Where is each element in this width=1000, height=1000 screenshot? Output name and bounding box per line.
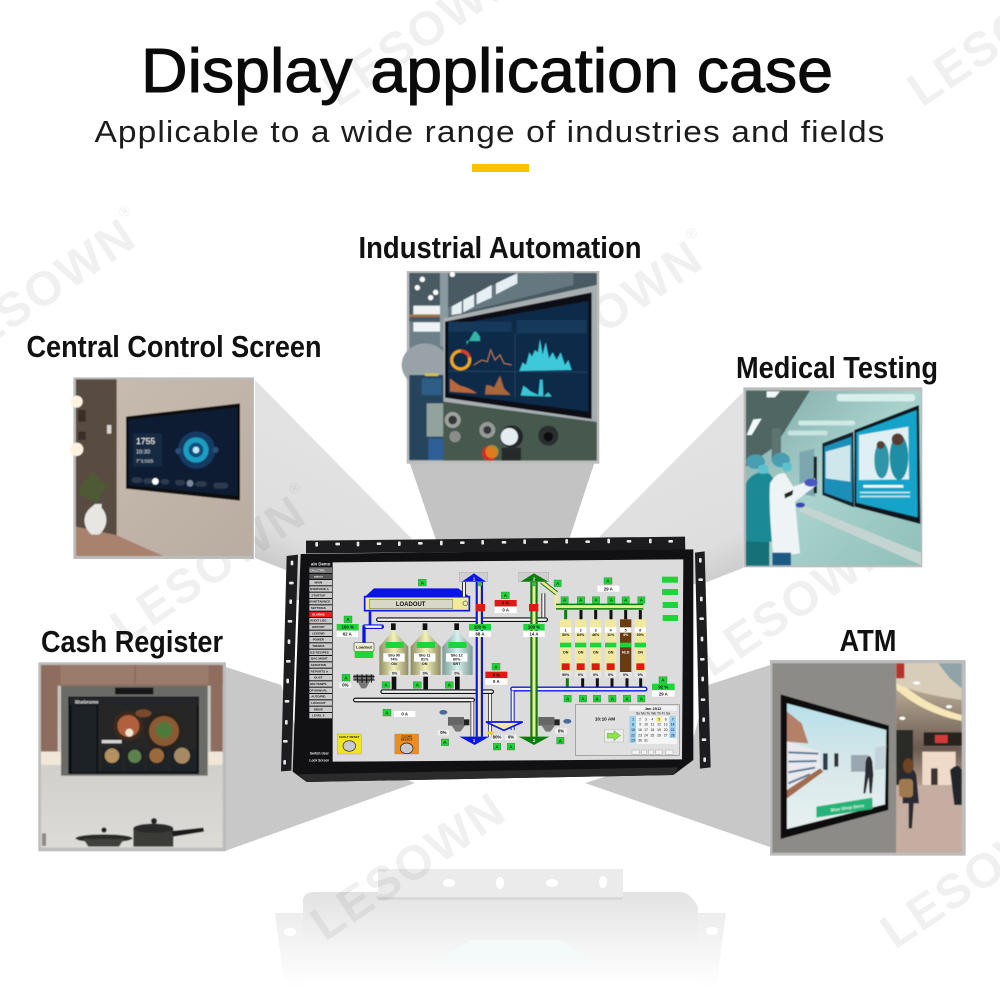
brand watermarks: LESOWN xyxy=(302,783,516,951)
amp readouts: 0% xyxy=(342,683,349,688)
clock and calendar panel: 31 xyxy=(644,739,648,743)
HMI sidebar: DUST xyxy=(314,676,323,680)
silos: 0% xyxy=(423,672,429,676)
panel: Industrial Automation photo xyxy=(402,271,599,464)
panel: Central Control Screen photo xyxy=(70,377,254,559)
clock and calendar panel: 10:10 AM xyxy=(595,716,615,721)
reflection of monitor xyxy=(275,869,726,990)
panel: central monitor xyxy=(281,537,711,782)
amp readouts: 68 A xyxy=(476,631,485,636)
green A status indicators: A xyxy=(448,683,452,688)
amp readouts: 0 % xyxy=(493,672,500,677)
green A status indicators: A xyxy=(346,617,350,622)
green A status indicators xyxy=(342,578,667,750)
brand watermarks: LESOWN xyxy=(102,486,316,654)
clock and calendar panel: 2 xyxy=(639,717,641,721)
HMI sidebar: OP MANUAL xyxy=(309,688,328,692)
HMI sidebar: BIN TEMPS xyxy=(310,682,326,686)
HMI sidebar: ALARMS xyxy=(312,612,325,616)
silos: 60% xyxy=(453,658,461,662)
HMI sidebar: BAG MGMT xyxy=(311,657,328,661)
green A status indicators: A xyxy=(640,598,644,603)
clock and calendar panel: Jan 2012 xyxy=(645,706,662,711)
amp readouts: 80% xyxy=(493,735,501,740)
silos: Loadout xyxy=(356,645,373,650)
HMI sidebar: AUTO/PID xyxy=(311,695,326,699)
green A status indicators: A xyxy=(559,738,563,743)
bin column stacks: 0% xyxy=(578,673,584,677)
bin column stacks: 64% xyxy=(577,633,585,637)
brand watermarks: ® xyxy=(683,223,703,244)
heading: ATM: ATM xyxy=(840,623,896,658)
clock and calendar panel: 25 xyxy=(650,733,654,737)
bin column stacks: ON xyxy=(593,650,599,654)
heading: Industrial Automation: Industrial Automation xyxy=(358,230,642,265)
amp readouts xyxy=(337,577,678,740)
silos: Silo 90 xyxy=(388,654,400,658)
clock and calendar panel: 4 xyxy=(651,717,653,721)
accent bar xyxy=(472,164,529,172)
clock and calendar panel: 15 xyxy=(631,728,635,732)
panel: ATM photo: Blue Shop Store xyxy=(830,803,865,813)
bin column stacks: 90% xyxy=(562,673,570,677)
panel: Central Control Screen photo: 10:30 xyxy=(136,449,150,455)
amp readouts: 0% xyxy=(558,728,564,733)
green A status indicators: A xyxy=(443,740,447,745)
clock and calendar panel: 18 xyxy=(650,728,654,732)
silos: Silo 12 xyxy=(451,654,463,658)
clock and calendar panel: 10 xyxy=(644,723,648,727)
bin column stacks: 0% xyxy=(638,673,644,677)
green A status indicators: A xyxy=(640,696,644,701)
clock and calendar panel: 29 xyxy=(631,739,635,743)
heading: Cash Register: Cash Register xyxy=(41,624,223,659)
silos: ON xyxy=(422,662,428,666)
brand watermarks: ® xyxy=(286,478,306,499)
elevator heads: 2 xyxy=(533,738,536,743)
HMI sidebar: ain Demo xyxy=(311,561,331,566)
green A status indicators: A xyxy=(556,581,560,586)
HMI sidebar: admin xyxy=(314,575,323,579)
HMI sidebar: LEVEL 6 xyxy=(312,714,325,718)
clock and calendar panel: 21 xyxy=(671,728,675,732)
green A status indicators: A xyxy=(611,696,615,701)
heading: Medical Testing: Medical Testing xyxy=(736,350,938,385)
green A status indicators: A xyxy=(610,598,614,603)
green A status indicators: A xyxy=(385,710,389,715)
monitor frame xyxy=(281,537,711,782)
amp readouts: 14 A xyxy=(530,631,539,636)
subtitle: Applicable to a wide range of industries and fields xyxy=(94,114,886,149)
heading: Central Control Screen: Central Control Screen xyxy=(26,329,322,364)
projection beams xyxy=(225,380,770,851)
green A status indicators: A xyxy=(494,664,498,669)
bin column stacks: 0% xyxy=(593,673,599,677)
clock and calendar panel: 22 xyxy=(631,733,635,737)
amp readouts: 29 A xyxy=(604,586,614,591)
loadout hopper: LOADOUT xyxy=(396,602,426,608)
panel: ATM photo xyxy=(770,660,966,856)
clock and calendar panel: 19 xyxy=(657,728,661,732)
elevator heads: 1 xyxy=(473,577,476,582)
clock and calendar panel: 8 xyxy=(632,723,634,727)
HMI sidebar: AUDIT LOG xyxy=(310,619,327,623)
HMI conveyors and pipes xyxy=(355,582,645,737)
fault reset button xyxy=(337,734,361,754)
brand watermarks: LESOWN xyxy=(499,231,713,399)
clock and calendar panel: 3 xyxy=(645,717,647,721)
amp readouts: 100 % xyxy=(528,625,540,630)
HMI sidebar: LEGEND xyxy=(312,631,325,635)
silos xyxy=(353,630,473,688)
amp readouts: 92 % xyxy=(658,684,668,689)
bin column stacks: 2 xyxy=(580,628,582,632)
bin column stacks: HLD xyxy=(622,650,630,654)
silos: 0% xyxy=(454,672,460,676)
green A status indicators: A xyxy=(563,598,567,603)
green A status indicators: A xyxy=(566,696,570,701)
clock and calendar panel: 12 xyxy=(657,723,661,727)
HMI sidebar xyxy=(308,561,332,762)
clock and calendar panel: 23 xyxy=(638,733,642,737)
clock and calendar panel: 14 xyxy=(671,723,675,727)
bin column stacks: 5 xyxy=(625,628,627,632)
HMI sidebar: ICE RECIPES xyxy=(310,650,329,654)
HMI sidebar: CALLCTRL xyxy=(309,568,325,572)
bin column stacks: ON xyxy=(638,650,643,654)
elevator heads: 1 xyxy=(473,738,476,743)
amp readouts: 100 % xyxy=(342,625,354,630)
bin column stacks: ON xyxy=(608,650,614,654)
amp readouts: 0% xyxy=(508,735,514,740)
amp readouts: 0 % xyxy=(502,601,510,606)
bin column stacks: 4% xyxy=(623,633,629,637)
amp readouts: 29 A xyxy=(659,691,669,696)
silos: 81% xyxy=(421,658,429,662)
HMI screen xyxy=(308,559,683,762)
trucks and scale hopper xyxy=(439,710,571,734)
HMI sidebar: REPORTS A xyxy=(311,669,329,673)
green A status indicators: A xyxy=(661,678,665,683)
clock and calendar panel: 30 xyxy=(638,739,642,743)
amp readouts: 100 % xyxy=(474,625,486,630)
amp readouts: 0% xyxy=(440,730,447,735)
clear select button: CLEAR xyxy=(402,734,413,738)
green A status indicators: A xyxy=(594,598,598,603)
clock and calendar panel: 27 xyxy=(664,733,668,737)
HMI sidebar: MAIN xyxy=(315,581,322,585)
green A status indicators: A xyxy=(606,579,610,584)
clock and calendar panel: 6 xyxy=(665,717,667,721)
HMI sidebar: HISTORY xyxy=(312,625,325,629)
HMI sidebar: AERATION xyxy=(311,663,326,667)
bin column stacks xyxy=(560,619,646,677)
clock and calendar panel: 26 xyxy=(657,733,661,737)
brand watermarks: ® xyxy=(116,201,136,222)
HMI sidebar: Switch User xyxy=(310,751,330,755)
title: Display application case xyxy=(141,37,833,106)
bin column stacks: 0% xyxy=(623,673,629,677)
green A status indicators: A xyxy=(624,598,628,603)
clock and calendar panel xyxy=(575,705,679,755)
amp readouts: 0 A xyxy=(493,679,500,684)
clear select button: SELECT xyxy=(401,738,413,742)
HMI sidebar: TRENDS xyxy=(312,644,324,648)
clock and calendar panel: 5 xyxy=(658,717,660,721)
brand watermarks: LESOWN xyxy=(689,519,903,687)
HMI sidebar: STARTUP xyxy=(311,593,325,597)
bin column stacks: 3 xyxy=(595,628,597,632)
panel: Central Control Screen photo: 7°1:025 xyxy=(136,459,153,465)
amp readouts: 0 A xyxy=(401,712,409,717)
green A status indicators: A xyxy=(495,744,499,749)
bin column stacks: 0% xyxy=(608,673,614,677)
clear select button xyxy=(395,734,419,754)
clock and calendar panel: Su Mo Tu We Th Fr Sa xyxy=(636,711,670,715)
green A status indicators: A xyxy=(509,744,513,749)
bin column stacks: ON xyxy=(563,650,569,654)
silos: ON xyxy=(391,662,397,666)
silos: 0% xyxy=(392,672,398,676)
green A status indicators: A xyxy=(416,683,420,688)
HMI sidebar: MAINTENANCE xyxy=(308,600,330,604)
bin column stacks: 6 xyxy=(639,628,641,632)
bin column stacks: ON xyxy=(578,650,584,654)
green A status indicators: A xyxy=(344,675,348,680)
green A status indicators: A xyxy=(421,580,425,585)
clock and calendar panel: 1 xyxy=(632,717,634,721)
silos: SRT xyxy=(453,662,461,666)
elevator heads xyxy=(459,572,549,745)
panel: Central Control Screen photo: 1755 xyxy=(136,436,155,446)
bin column stacks: 4 xyxy=(610,628,613,632)
bin column stacks: 11% xyxy=(607,633,615,637)
bin column stacks: 50% xyxy=(562,633,570,637)
bin column stacks: 1 xyxy=(565,628,567,632)
panel: Cash Register photo xyxy=(38,662,226,851)
panel: Cash Register photo: iDaGrams xyxy=(75,699,99,705)
HMI sidebar: POWER xyxy=(313,638,325,642)
loadout hopper xyxy=(365,588,469,611)
amp readouts: 62 A xyxy=(343,631,353,636)
clock and calendar panel: 20 xyxy=(664,728,668,732)
clock and calendar panel: 17 xyxy=(644,728,648,732)
panel: Medical Testing photo xyxy=(743,387,922,567)
clock and calendar panel: 16 xyxy=(638,728,642,732)
green A status indicators: A xyxy=(595,696,599,701)
HMI sidebar: LOCKOUT xyxy=(311,701,326,705)
silos: 74% xyxy=(390,658,398,662)
silos: Silo 11 xyxy=(419,654,430,658)
clock and calendar panel: 9 xyxy=(639,723,641,727)
fault reset button: FAULT RESET xyxy=(339,735,360,739)
clock and calendar panel: 28 xyxy=(671,733,675,737)
green A status indicators: A xyxy=(384,683,388,688)
HMI sidebar: Lock Screen xyxy=(309,758,329,762)
clock and calendar panel: 13 xyxy=(664,723,668,727)
HMI sidebar: OVERVIEW A xyxy=(310,587,330,591)
green A status indicators: A xyxy=(504,593,508,598)
elevator heads: 2 xyxy=(533,577,536,582)
clock and calendar panel: 11 xyxy=(651,723,654,727)
clock and calendar panel: 7 xyxy=(672,717,674,721)
HMI sidebar: SETTINGS xyxy=(311,606,326,610)
bin column stacks: 46% xyxy=(592,633,600,637)
HMI sidebar: DRIVE xyxy=(314,707,323,711)
amp readouts: 0 A xyxy=(502,608,510,613)
green A status indicators: A xyxy=(581,696,585,701)
bin column stacks: 90% xyxy=(637,633,645,637)
green A status indicators: A xyxy=(579,598,583,603)
green A status indicators: A xyxy=(625,696,629,701)
clock and calendar panel: 24 xyxy=(644,733,648,737)
